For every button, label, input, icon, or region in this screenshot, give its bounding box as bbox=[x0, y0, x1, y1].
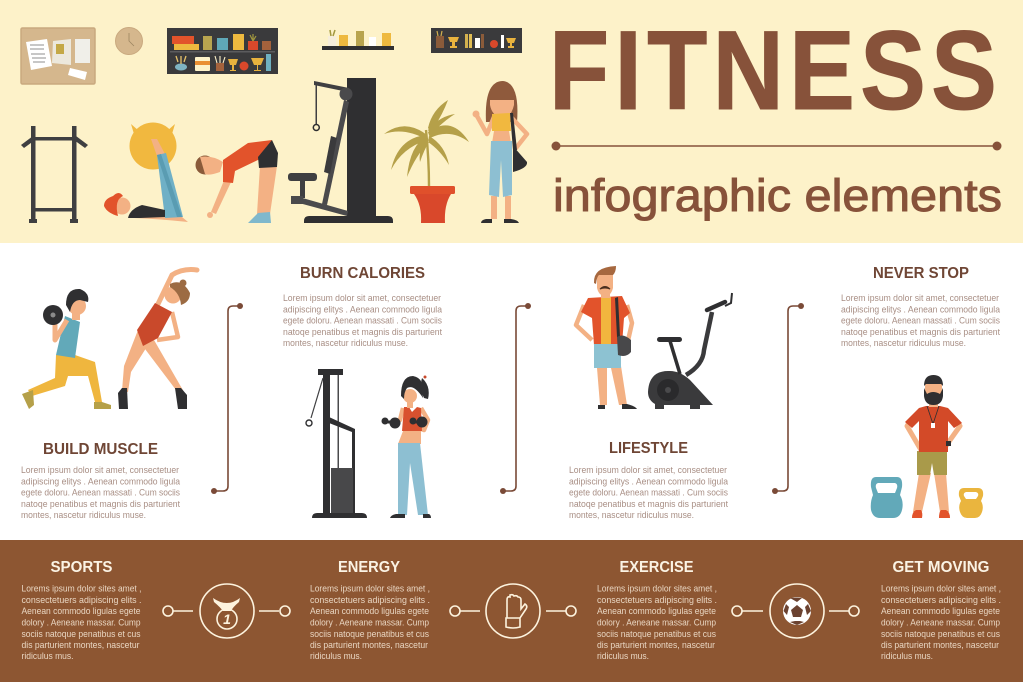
connector 2 bbox=[500, 303, 531, 494]
icon: yellow kettlebell bbox=[959, 488, 983, 518]
text block: energy: Lorems ipsum dolor sites amet , bbox=[310, 582, 430, 594]
icon: blue kettlebell bbox=[871, 477, 903, 518]
text block: energy: dis parturient montes, nascetur bbox=[310, 639, 428, 650]
text block: exercise: Lorems ipsum dolor sites amet , bbox=[597, 582, 717, 594]
figure: woman lying with exercise ball bbox=[104, 122, 188, 222]
text block: energy: ENERGY bbox=[338, 559, 400, 576]
text block: energy: Aenean commodo ligulas egete bbox=[310, 605, 429, 616]
text block: get moving: ridiculus mus. bbox=[881, 650, 933, 661]
text block: exercise: dis parturient montes, nascetur bbox=[597, 639, 715, 650]
text block: lifestyle: Lorem ipsum dolor sit amet, consectetuer bbox=[569, 465, 727, 475]
icon: pin board bbox=[21, 28, 95, 84]
text block: energy: ridiculus mus. bbox=[310, 650, 362, 661]
text block: build muscle: Lorem ipsum dolor sit amet, consectetuer bbox=[21, 465, 179, 475]
text block: sports: dolory . Aeneane massar. Cump bbox=[22, 616, 140, 628]
text block: build muscle bbox=[21, 441, 181, 520]
text block: never stop bbox=[841, 265, 1001, 348]
figure: woman with bag bbox=[472, 81, 527, 223]
text block: build muscle: BUILD MUSCLE bbox=[43, 441, 158, 458]
text block: exercise: consectetuers adipiscing elits . bbox=[597, 594, 717, 605]
text block: build muscle: adipiscing elitys . Aenean commodo ligula bbox=[21, 476, 181, 486]
text block: get moving: dis parturient montes, nascetur bbox=[881, 639, 999, 650]
text block: get moving: GET MOVING bbox=[892, 559, 990, 576]
icon: glove in circle bbox=[450, 584, 576, 638]
text block: never stop: natoqe penatibus et magnis dis parturient bbox=[841, 327, 1000, 337]
text block: burn calories: BURN CALORIES bbox=[300, 265, 425, 282]
text block: energy: sociis natoque penatibus et cus bbox=[310, 628, 429, 639]
connector 1 bbox=[211, 303, 243, 494]
text block: lifestyle: LIFESTYLE bbox=[609, 440, 688, 457]
text block: sports: SPORTS bbox=[50, 559, 113, 576]
text block: exercise: ridiculus mus. bbox=[597, 650, 649, 661]
text block: exercise: dolory . Aeneane massar. Cump bbox=[597, 616, 716, 628]
text block: get moving bbox=[881, 559, 1001, 661]
text block: lifestyle: montes, nascetur ridiculus muse. bbox=[569, 510, 694, 520]
icon: exercise bike bbox=[648, 293, 732, 409]
text block: burn calories: montes, nascetur ridiculus muse. bbox=[283, 338, 408, 348]
text block: energy bbox=[310, 559, 430, 661]
figure: coach with whistle bbox=[905, 375, 962, 518]
text block: get moving: sociis natoque penatibus et cus bbox=[881, 628, 1000, 639]
text block: never stop: adipiscing elitys . Aenean commodo ligula bbox=[841, 304, 1001, 314]
icon: potted plant bbox=[384, 100, 469, 223]
text block: exercise: sociis natoque penatibus et cus bbox=[597, 628, 716, 639]
icon: large shelf bbox=[167, 28, 278, 74]
text block: never stop: montes, nascetur ridiculus muse. bbox=[841, 338, 966, 348]
text block: exercise: Aenean commodo ligulas egete bbox=[597, 605, 716, 616]
text block: get moving: Aenean commodo ligulas egete bbox=[881, 605, 1000, 616]
icon: trophy shelf bbox=[431, 28, 522, 53]
title: FITNESS: FITNESS bbox=[549, 9, 1002, 133]
text block: never stop: egete doloru. Aenean massati . Cum sociis bbox=[841, 316, 1000, 326]
text block: sports: ridiculus mus. bbox=[22, 650, 74, 661]
icon: wall clock bbox=[116, 28, 142, 54]
text block: build muscle: natoqe penatibus et magnis dis parturient bbox=[21, 499, 180, 509]
text block: lifestyle: adipiscing elitys . Aenean commodo ligula bbox=[569, 476, 729, 486]
panel: white middle bbox=[0, 243, 1023, 540]
figure: woman side-stretching bbox=[118, 270, 197, 409]
figure: man lunging with weight bbox=[22, 289, 111, 409]
icon: cable machine bbox=[306, 369, 367, 518]
figure: man bending forward bbox=[196, 140, 278, 223]
icon: weight machine bbox=[288, 78, 393, 223]
text block: exercise bbox=[597, 559, 717, 661]
text block: never stop: NEVER STOP bbox=[873, 265, 969, 282]
text block: burn calories bbox=[283, 265, 443, 348]
text block: burn calories: Lorem ipsum dolor sit amet, consectetuer bbox=[283, 293, 441, 303]
text block: get moving: consectetuers adipiscing elits . bbox=[881, 594, 1001, 605]
icon: pull-up bar bbox=[21, 126, 88, 223]
text block: energy: consectetuers adipiscing elits . bbox=[310, 594, 430, 605]
icon: medal in circle bbox=[163, 584, 290, 638]
text block: lifestyle bbox=[569, 440, 729, 520]
text block: sports: Aenean commodo ligulas egete bbox=[22, 605, 140, 616]
figure: man with moustache and bag bbox=[576, 266, 637, 409]
subtitle: infographic elements bbox=[553, 170, 1002, 221]
icon: soccer ball in circle bbox=[732, 584, 859, 638]
icon: medal in circle: 1 bbox=[223, 611, 231, 627]
text block: sports: Lorems ipsum dolor sites amet , bbox=[22, 582, 142, 594]
text block: lifestyle: egete doloru. Aenean massati . Cum sociis bbox=[569, 488, 728, 498]
text block: sports: sociis natoque penatibus et cus bbox=[22, 628, 141, 639]
text block: sports: dis parturient montes, nascetur bbox=[22, 639, 140, 650]
text block: burn calories: natoqe penatibus et magnis dis parturient bbox=[283, 327, 442, 337]
text block: burn calories: adipiscing elitys . Aenean commodo ligula bbox=[283, 304, 443, 314]
connector 3 bbox=[772, 303, 804, 494]
icon: small wall shelf bbox=[322, 30, 394, 50]
text block: never stop: Lorem ipsum dolor sit amet, consectetuer bbox=[841, 293, 999, 303]
panel: cream header bbox=[0, 0, 1023, 243]
panel: brown footer bbox=[0, 540, 1023, 682]
text block: energy: dolory . Aeneane massar. Cump bbox=[310, 616, 429, 628]
figure: woman with dumbbells bbox=[382, 376, 431, 518]
text block: burn calories: egete doloru. Aenean massati . Cum sociis bbox=[283, 316, 442, 326]
text block: build muscle: egete doloru. Aenean massati . Cum sociis bbox=[21, 488, 180, 498]
text block: get moving: Lorems ipsum dolor sites amet , bbox=[881, 582, 1001, 594]
text block: build muscle: montes, nascetur ridiculus muse. bbox=[21, 510, 146, 520]
text block: sports bbox=[22, 559, 142, 661]
text block: sports: consectetuers adipiscing elits . bbox=[22, 594, 142, 605]
title divider line bbox=[552, 142, 1002, 150]
text block: lifestyle: natoqe penatibus et magnis dis parturient bbox=[569, 499, 728, 509]
text block: get moving: dolory . Aeneane massar. Cump bbox=[881, 616, 1000, 628]
text block: exercise: EXERCISE bbox=[620, 559, 694, 576]
